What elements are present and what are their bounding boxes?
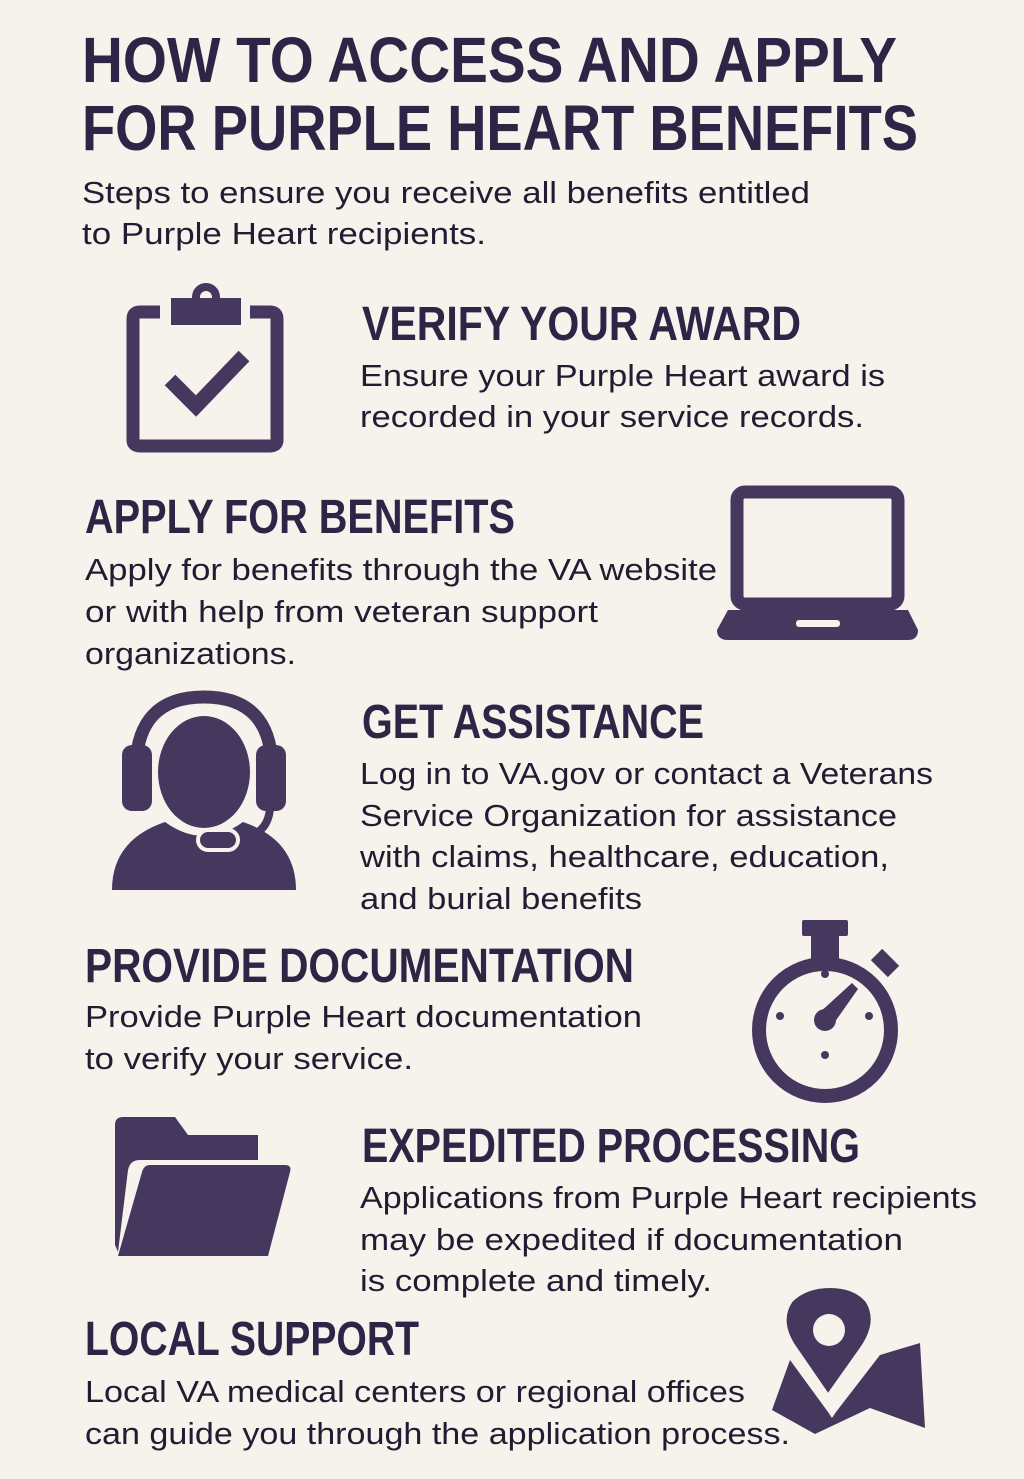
step: get assistance [359, 696, 933, 916]
icon: laptop [717, 492, 918, 640]
step: expedited processing: is complete and timely. [360, 1263, 712, 1298]
step: apply for benefits: Apply for benefits through the VA website [85, 552, 717, 587]
title [82, 24, 918, 164]
icon: clipboard [133, 287, 277, 446]
icon: headset support [112, 697, 296, 890]
step: verify your award: Ensure your Purple Heart award is [360, 358, 885, 393]
step: verify your award [360, 298, 885, 434]
step: get assistance: with claims, healthcare, education, [359, 839, 889, 874]
step: local support: LOCAL SUPPORT [85, 1313, 419, 1366]
step: verify your award: VERIFY YOUR AWARD [362, 298, 801, 351]
step: apply for benefits [85, 491, 717, 671]
step: provide documentation [85, 940, 642, 1076]
subtitle [82, 175, 810, 251]
step: provide documentation: to verify your service. [85, 1041, 413, 1076]
step: expedited processing: may be expedited if documentation [360, 1222, 903, 1257]
icon: map pin [772, 1285, 925, 1434]
step: apply for benefits: APPLY FOR BENEFITS [85, 491, 515, 544]
step: expedited processing: EXPEDITED PROCESSING [362, 1120, 860, 1173]
subtitle: to Purple Heart recipients. [82, 216, 486, 251]
step: expedited processing [360, 1120, 977, 1298]
subtitle: Steps to ensure you receive all benefits entitled [82, 175, 810, 210]
step: expedited processing: Applications from Purple Heart recipients [360, 1180, 977, 1215]
title: HOW TO ACCESS AND APPLY [82, 24, 897, 96]
step: provide documentation: Provide Purple Heart documentation [85, 999, 642, 1034]
step: get assistance: and burial benefits [360, 881, 642, 916]
step: get assistance: Log in to VA.gov or contact a Veterans [360, 756, 933, 791]
icon: stopwatch [759, 920, 899, 1096]
step: get assistance: Service Organization for assistance [360, 798, 897, 833]
step: local support: Local VA medical centers or regional offices [85, 1374, 745, 1409]
step: get assistance: GET ASSISTANCE [362, 696, 704, 749]
step: verify your award: recorded in your service records. [360, 399, 864, 434]
step: apply for benefits: organizations. [85, 636, 296, 671]
step: apply for benefits: or with help from veteran support [85, 594, 598, 629]
icon: folder [115, 1117, 290, 1256]
step: local support: can guide you through the application process. [85, 1416, 790, 1451]
step: local support [85, 1313, 790, 1451]
step: provide documentation: PROVIDE DOCUMENTATION [85, 940, 634, 993]
